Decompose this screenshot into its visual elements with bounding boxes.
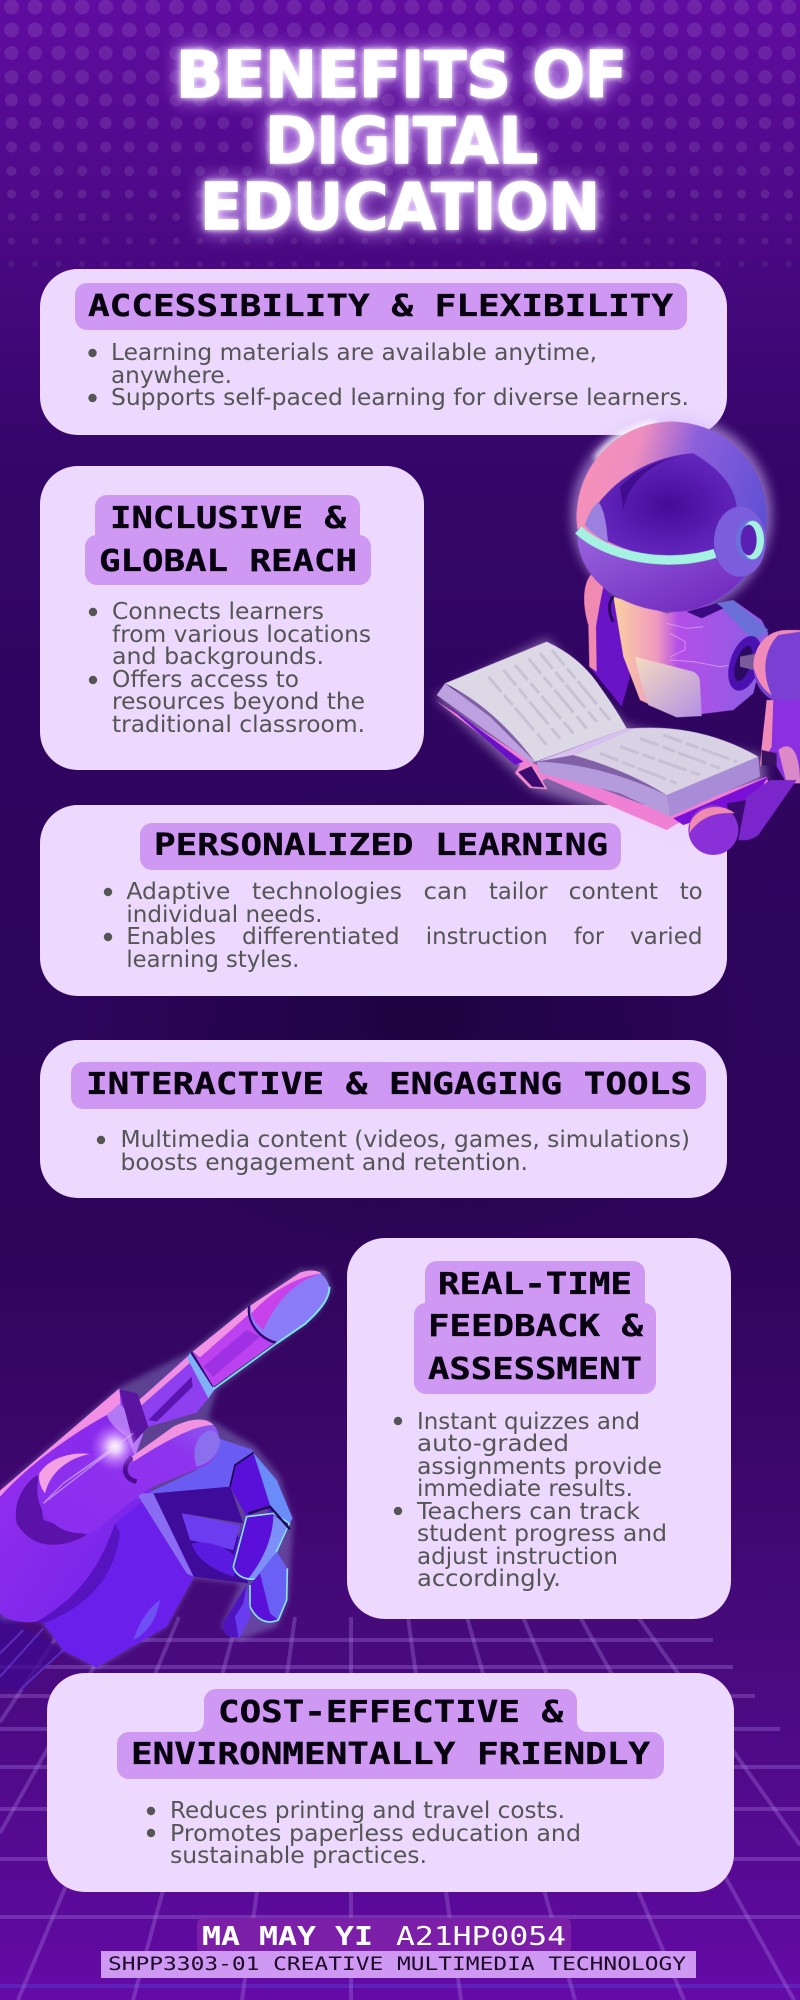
- bullet list: personalized: for: [574, 924, 605, 950]
- head rim highlight: [597, 423, 657, 460]
- heading: interactive: [71, 1062, 706, 1109]
- panel: inclusive and global reach: [40, 466, 424, 770]
- bullet list: real-time: student progress and: [417, 1521, 667, 1547]
- title: EDUCATION: [200, 170, 600, 245]
- panel: personalized learning: [40, 805, 727, 996]
- bullet list: real-time: assignments provide: [417, 1454, 662, 1480]
- book text lines: [488, 650, 737, 783]
- bullet list: personalized: [104, 879, 703, 973]
- dark palm interior: [153, 1486, 248, 1583]
- right page: [573, 728, 758, 795]
- lower fingers: [250, 1552, 287, 1622]
- heading: cost-effective: COST-EFFECTIVE &: [218, 1695, 564, 1730]
- bullet list: personalized: Enables: [126, 924, 216, 950]
- panel: cost-effective and environmentally friendly: [47, 1673, 734, 1892]
- right page thickness: [537, 762, 670, 817]
- bullet list: real-time: adjust instruction: [417, 1544, 618, 1570]
- book cover: [435, 700, 768, 830]
- bullet list: interactive: Multimedia content (videos, games, simulations): [120, 1127, 690, 1153]
- perspective floor grid: [0, 1617, 800, 2000]
- robot reading book illustration: [435, 415, 800, 855]
- course title: [101, 1951, 696, 1978]
- right shoulder joint: [722, 630, 800, 705]
- bullet list: inclusive: from various locations: [112, 622, 371, 648]
- bullet list: interactive: [97, 1127, 690, 1176]
- heading: cost-effective: [117, 1689, 664, 1779]
- author name: A21HP0054: [396, 1922, 566, 1952]
- heading: personalized: [140, 823, 621, 870]
- robot hand illustration: [0, 1269, 332, 1690]
- dark knuckle hollow: [16, 1475, 87, 1545]
- heading: inclusive: INCLUSIVE &: [110, 501, 347, 536]
- back of hand: [0, 1388, 153, 1622]
- panel: real-time feedback and assessment: [347, 1238, 731, 1619]
- bullet list: inclusive: Connects learners: [112, 599, 324, 625]
- author name: MA MAY YI: [202, 1922, 373, 1952]
- panel: interactive and engaging tools: [40, 1040, 727, 1198]
- background dot pattern: [12, 7, 800, 264]
- title: BENEFITS OF: [176, 38, 627, 113]
- bullet list: interactive: boosts engagement and retention.: [120, 1150, 528, 1176]
- bullet list: personalized: tailor: [489, 879, 548, 905]
- bullet list: inclusive: resources beyond the: [112, 689, 365, 715]
- wrist shadow and cables: [0, 1613, 63, 1690]
- bullet list: accessibility: anywhere.: [111, 363, 232, 389]
- footer: author and course: [101, 1918, 696, 1978]
- bullet list: cost-effective: Reduces printing and travel costs.: [170, 1798, 565, 1824]
- bullet list: real-time: Teachers can track: [416, 1499, 641, 1525]
- robot glow: [435, 415, 772, 837]
- course title: SHPP3303-01 CREATIVE MULTIMEDIA TECHNOLOGY: [108, 1953, 687, 1975]
- index joint: [187, 1353, 215, 1398]
- ear module: [714, 507, 766, 577]
- bullet list: inclusive: [89, 599, 371, 738]
- heading: cost-effective: ENVIRONMENTALLY FRIENDLY: [131, 1737, 650, 1772]
- bullet list: inclusive: and backgrounds.: [112, 644, 324, 670]
- bullet list: cost-effective: [147, 1798, 581, 1869]
- bullet list: real-time: accordingly.: [417, 1566, 561, 1592]
- heading: personalized: PERSONALIZED LEARNING: [154, 828, 608, 863]
- wheel: [688, 780, 797, 855]
- heading: real-time: REAL-TIME: [438, 1267, 632, 1302]
- bullet list: personalized: instruction: [426, 924, 548, 950]
- bullet list: personalized: individual needs.: [126, 902, 322, 928]
- bullet list: real-time: Instant quizzes and: [417, 1409, 640, 1435]
- title: DIGITAL: [265, 104, 538, 179]
- fingertip: [250, 1271, 329, 1342]
- index middle segment: [193, 1306, 275, 1387]
- bullet list: personalized: can: [424, 879, 468, 905]
- bullet list: personalized: learning styles.: [126, 947, 299, 973]
- heading: accessibility: [75, 283, 687, 330]
- bullet list: accessibility: Learning materials are available anytime,: [111, 340, 597, 366]
- bullet list: personalized: to: [680, 879, 703, 905]
- bullet list: real-time: [394, 1409, 667, 1592]
- heading: inclusive: GLOBAL REACH: [99, 544, 357, 579]
- index base segment: [138, 1354, 215, 1427]
- bullet list: personalized: varied: [630, 924, 703, 950]
- bullet list: real-time: auto-graded: [417, 1431, 569, 1457]
- author name: [197, 1918, 571, 1953]
- left page: [445, 642, 627, 762]
- bullet list: accessibility: [88, 340, 689, 411]
- heading: real-time: [414, 1261, 656, 1394]
- heading: real-time: FEEDBACK &: [428, 1309, 644, 1344]
- light flare: [90, 1422, 140, 1472]
- heading: inclusive: [85, 495, 371, 585]
- thumb: [37, 1420, 220, 1533]
- left arm: [584, 573, 630, 707]
- robot torso: [609, 597, 768, 717]
- curled finger upper: [230, 1453, 293, 1532]
- blue knuckle: [133, 1437, 253, 1500]
- bullet list: inclusive: Offers access to: [112, 667, 299, 693]
- curled finger lower: [233, 1512, 289, 1580]
- bullet list: personalized: differentiated: [242, 924, 400, 950]
- bullet list: accessibility: Supports self-paced learning for diverse learners.: [111, 385, 689, 411]
- bullet list: real-time: immediate results.: [417, 1476, 633, 1502]
- robot head: [577, 422, 767, 612]
- right forearm: [760, 700, 800, 783]
- title: [176, 38, 627, 245]
- glow outline: [0, 1269, 332, 1668]
- visor band: [578, 530, 715, 560]
- heading: real-time: ASSESSMENT: [428, 1352, 642, 1387]
- bullet list: personalized: content: [569, 879, 658, 905]
- bullet list: cost-effective: Promotes paperless education and: [170, 1821, 581, 1847]
- lower palm: [43, 1493, 194, 1667]
- heading: interactive: INTERACTIVE & ENGAGING TOOLS: [86, 1067, 692, 1102]
- panel: accessibility and flexibility: [40, 269, 727, 435]
- bullet list: personalized: Adaptive: [126, 879, 230, 905]
- dark centre glow: [80, 775, 760, 1255]
- bullet list: inclusive: traditional classroom.: [112, 712, 365, 738]
- left page thickness: [437, 683, 535, 763]
- open book: [435, 642, 768, 830]
- bullet list: cost-effective: sustainable practices.: [170, 1843, 427, 1869]
- heading: accessibility: ACCESSIBILITY & FLEXIBILITY: [88, 289, 673, 324]
- bullet list: personalized: technologies: [252, 879, 402, 905]
